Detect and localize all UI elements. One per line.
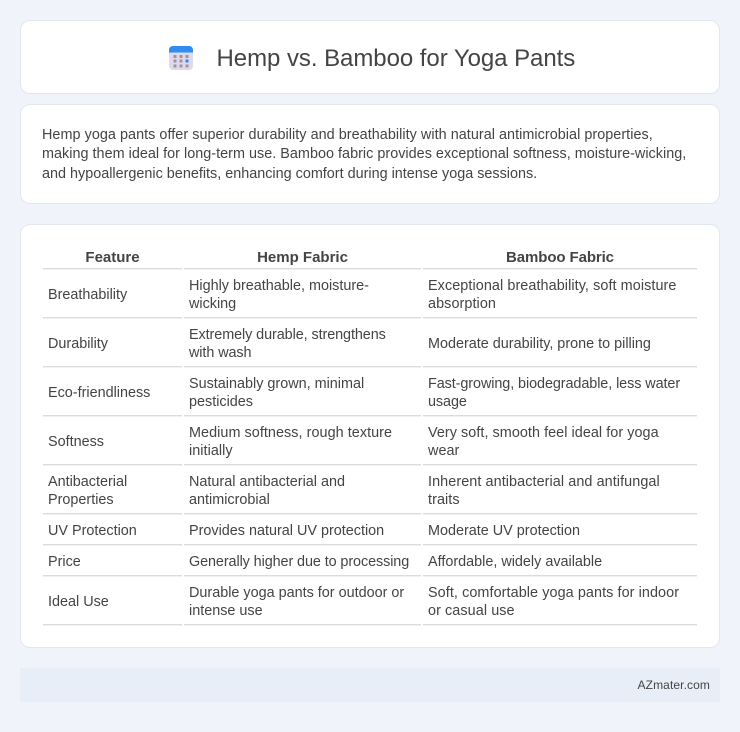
hemp uv protection: Provides natural UV protection [189, 523, 384, 539]
row: antibacterial properties: Properties [48, 492, 114, 508]
row: uv protection: UV Protection [48, 523, 137, 539]
hemp softness: Medium softness, rough texture [189, 425, 392, 441]
row: antibacterial properties [48, 474, 127, 508]
intro text: making them ideal for long-term use. Bamboo fabric provides exceptional softness, moisture-wicking, [42, 146, 686, 162]
hemp softness: initially [189, 443, 233, 459]
hemp softness [189, 425, 392, 459]
hemp ideal use: Durable yoga pants for outdoor or [189, 585, 404, 601]
row: ideal use: Ideal Use [48, 594, 109, 610]
bamboo softness [428, 425, 659, 459]
icon: calendar [169, 46, 193, 70]
row: durability: Durability [48, 336, 108, 352]
hemp breathability: wicking [189, 296, 236, 312]
bamboo breathability: absorption [428, 296, 496, 312]
hemp ideal use [189, 585, 404, 619]
intro text: Hemp yoga pants offer superior durability and breathability with natural antimicrobial properties, [42, 126, 653, 142]
intro text [42, 126, 686, 182]
bamboo breathability: Exceptional breathability, soft moisture [428, 278, 676, 294]
footer credit: AZmater.com [638, 678, 710, 692]
title: Hemp vs. Bamboo for Yoga Pants [216, 45, 575, 72]
bamboo antibacterial: Inherent antibacterial and antifungal [428, 474, 660, 490]
hemp durability: with wash [189, 345, 251, 361]
bamboo antibacterial: traits [428, 492, 460, 508]
hemp ideal use: intense use [189, 603, 263, 619]
panel: comparison table [20, 224, 720, 648]
footer bar [20, 668, 720, 702]
hemp antibacterial [189, 474, 345, 508]
bamboo durability: Moderate durability, prone to pilling [428, 336, 651, 352]
bamboo ideal use [428, 585, 679, 619]
hemp eco-friendliness: Sustainably grown, minimal [189, 376, 364, 392]
hemp eco-friendliness [189, 376, 364, 410]
bamboo antibacterial [428, 474, 660, 508]
hemp price: Generally higher due to processing [189, 554, 409, 570]
row: breathability: Breathability [48, 287, 127, 303]
row: softness: Softness [48, 434, 104, 450]
hemp antibacterial: antimicrobial [189, 492, 270, 508]
intro text: and hypoallergenic benefits, enhancing comfort during intense yoga sessions. [42, 166, 537, 182]
bamboo uv protection: Moderate UV protection [428, 523, 580, 539]
bamboo softness: Very soft, smooth feel ideal for yoga [428, 425, 659, 441]
bamboo ideal use: or casual use [428, 603, 515, 619]
title card [20, 20, 720, 94]
table header: hemp fabric: Hemp Fabric [257, 249, 348, 266]
hemp antibacterial: Natural antibacterial and [189, 474, 345, 490]
intro panel [20, 104, 720, 204]
hemp eco-friendliness: pesticides [189, 394, 253, 410]
table header: bamboo fabric: Bamboo Fabric [506, 249, 614, 266]
row: antibacterial properties: Antibacterial [48, 474, 127, 490]
row: price: Price [48, 554, 81, 570]
bamboo eco-friendliness [428, 376, 680, 410]
bamboo eco-friendliness: usage [428, 394, 467, 410]
hemp breathability [189, 278, 369, 312]
hemp breathability: Highly breathable, moisture- [189, 278, 369, 294]
bamboo ideal use: Soft, comfortable yoga pants for indoor [428, 585, 679, 601]
hemp durability [189, 327, 386, 361]
hemp durability: Extremely durable, strengthens [189, 327, 386, 343]
bamboo eco-friendliness: Fast-growing, biodegradable, less water [428, 376, 680, 392]
bamboo price: Affordable, widely available [428, 554, 602, 570]
table header: feature: Feature [85, 249, 140, 266]
row: eco-friendliness: Eco-friendliness [48, 385, 150, 401]
bamboo softness: wear [428, 443, 459, 459]
bamboo breathability [428, 278, 676, 312]
